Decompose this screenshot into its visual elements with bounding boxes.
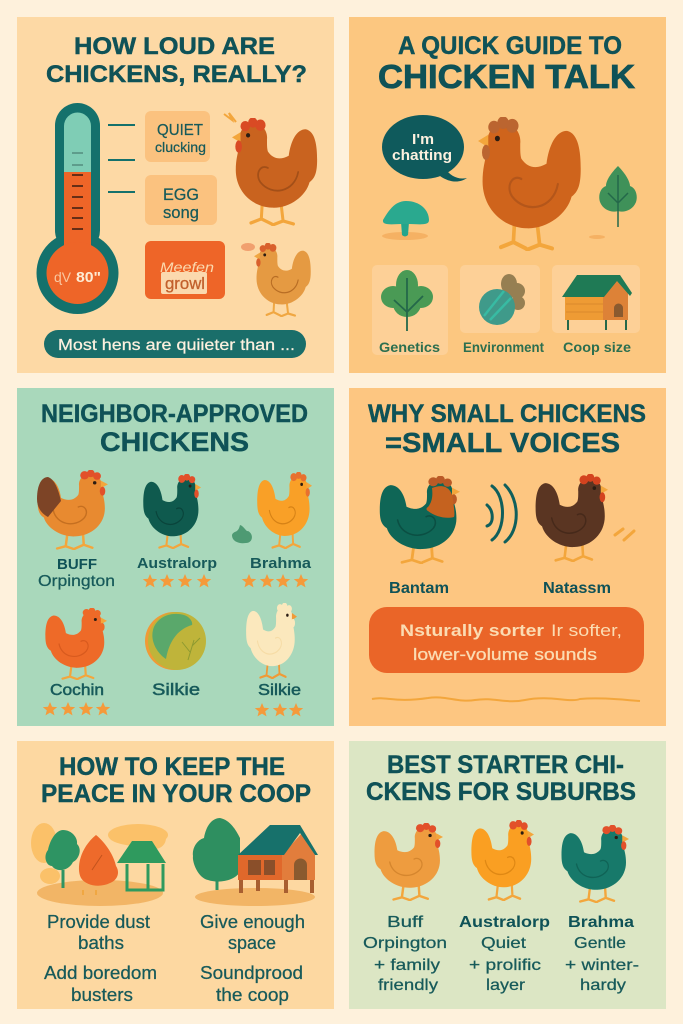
card: coop size: Coop size <box>563 339 631 355</box>
breed: australorp: layer <box>486 977 526 994</box>
tip: dust baths: Provide dust <box>47 912 150 932</box>
panel: chicken talk <box>349 17 666 373</box>
heading: keep the peace: PEACE IN YOUR COOP <box>41 780 311 808</box>
icon: sound waves <box>487 485 516 542</box>
breed: buff orpington: + family <box>374 957 440 974</box>
panel: how loud are chickens <box>17 17 334 373</box>
callout: softer sounds: lower-volume sounds <box>413 645 597 664</box>
panel: best starter chickens <box>349 741 666 1009</box>
heading: how loud: HOW LOUD ARE <box>74 33 275 60</box>
icon: bantam hen <box>380 476 460 563</box>
label: growl <box>145 241 225 299</box>
label: egg song <box>145 175 217 225</box>
callout: softer sounds <box>369 607 644 673</box>
speech bubble: chatting <box>392 147 452 164</box>
thermometer chart: ɖV <box>54 269 72 285</box>
card: environment <box>460 265 544 355</box>
callout: softer sounds: Nsturally sorter <box>400 621 544 640</box>
callout: softer sounds: Ir softer, <box>551 621 622 640</box>
label: quiet clucking <box>145 111 210 162</box>
tip: soundproof: Soundprood <box>200 963 303 983</box>
tip: enough space: Give enough <box>200 912 305 932</box>
tip: enough space <box>200 912 305 953</box>
card: genetics: Genetics <box>379 339 440 355</box>
breed: buff orpington <box>363 823 447 994</box>
thermometer chart <box>36 103 135 314</box>
breed: brahma: Brahma <box>568 914 634 931</box>
thermometer chart: 80" <box>76 269 101 286</box>
tip: enough space: space <box>228 933 276 953</box>
illustration: dust bath scene <box>31 823 168 906</box>
icon: brown hen <box>232 117 317 225</box>
heading: best starter <box>366 751 636 806</box>
tip: dust baths: baths <box>78 933 124 953</box>
label: egg song: song <box>163 203 199 222</box>
label: growl: Meefen <box>160 259 214 275</box>
callout: most hens: Most hens are quiieter than ... <box>58 337 295 354</box>
heading: best starter: BEST STARTER CHI- <box>387 751 624 779</box>
heading: neighbor-approved: CHICKENS <box>100 427 249 457</box>
rating stars <box>43 702 110 715</box>
breed: australorp: Australorp <box>459 914 550 931</box>
icon: big hen <box>478 116 581 250</box>
icon: brown hen <box>536 474 608 561</box>
breed: silkie hen <box>246 603 303 716</box>
breed: australorp <box>137 474 217 587</box>
heading: small chickens <box>368 400 646 458</box>
breed: cochin: Cochin <box>50 682 104 699</box>
icon: tree leaf <box>589 166 637 239</box>
tip: boredom busters: Add boredom <box>44 963 157 983</box>
card: coop size <box>552 265 640 355</box>
tip: soundproof <box>200 963 303 1005</box>
panel: neighbor-approved chickens <box>17 388 334 726</box>
heading: quick guide: CHICKEN TALK <box>378 58 635 95</box>
heading: how loud: CHICKENS, REALLY? <box>46 61 307 88</box>
heading: neighbor-approved: NEIGHBOR-APPROVED <box>41 400 308 428</box>
card: genetics <box>372 265 448 355</box>
label: growl: growl <box>165 274 205 293</box>
breed: australorp: + prolific <box>469 957 541 974</box>
illustration: coop scene <box>193 818 318 906</box>
breed: brahma <box>242 472 312 587</box>
breed: brahma: + winter- <box>565 957 639 974</box>
breed: silkie hen: Silkie <box>258 682 301 699</box>
breed: australorp: Australorp <box>137 555 217 572</box>
tip: dust baths <box>47 912 150 953</box>
callout: most hens <box>44 330 306 358</box>
card: environment: Environment <box>463 339 544 355</box>
panel: keep the peace <box>17 741 334 1009</box>
breed: buff orpington <box>37 470 115 590</box>
icon: puff <box>241 243 255 251</box>
breed: buff orpington: friendly <box>378 977 438 994</box>
icon: ball and leaves <box>479 274 525 325</box>
breed: brahma: hardy <box>580 977 626 994</box>
speech bubble: I'm <box>412 131 434 148</box>
icon: leaf <box>381 270 433 331</box>
breed: silkie cabbage <box>145 612 206 699</box>
breed: buff orpington: Orpington <box>38 573 115 590</box>
heading: small chickens: WHY SMALL CHICKENS <box>368 400 646 428</box>
breed: silkie cabbage: Silkie <box>152 680 200 699</box>
heading: small chickens: =SMALL VOICES <box>385 427 620 458</box>
breed: brahma: Gentle <box>574 935 626 952</box>
breed: buff orpington: Buff <box>387 914 424 931</box>
label: quiet clucking: QUIET <box>157 122 203 139</box>
breed: buff orpington: BUFF <box>57 556 97 573</box>
tip: boredom busters: busters <box>71 985 133 1005</box>
breed: australorp <box>459 820 550 994</box>
heading: best starter: CKENS FOR SUBURBS <box>366 778 636 806</box>
icon: coop <box>562 275 632 330</box>
breed: australorp: Quiet <box>481 935 527 952</box>
breed: brahma: Brahma <box>250 555 312 572</box>
tip: soundproof: the coop <box>216 985 289 1005</box>
icon: small hen <box>254 243 311 316</box>
label: natassm: Natassm <box>543 580 611 597</box>
speech bubble <box>382 115 467 182</box>
breed: brahma <box>562 825 639 994</box>
tip: boredom busters <box>44 963 157 1005</box>
heading: how loud <box>46 33 307 88</box>
rating stars <box>242 574 308 587</box>
heading: neighbor-approved <box>41 400 308 457</box>
label: quiet clucking: clucking <box>155 139 206 155</box>
icon: sparks <box>224 113 236 122</box>
icon: motion marks <box>615 529 634 540</box>
heading: keep the peace <box>41 753 311 808</box>
icon: small leaf <box>232 525 252 543</box>
rating stars <box>255 703 303 716</box>
heading: keep the peace: HOW TO KEEP THE <box>59 753 285 781</box>
label: egg song: EGG <box>163 185 199 204</box>
label: bantam: Bantam <box>389 580 449 597</box>
heading: quick guide: A QUICK GUIDE TO <box>398 32 622 60</box>
rating stars <box>143 574 211 587</box>
panel: small voices <box>349 388 666 726</box>
breed: buff orpington: Orpington <box>363 935 447 952</box>
heading: quick guide <box>378 32 635 95</box>
icon: mushroom <box>382 201 429 240</box>
breed: cochin <box>43 608 110 715</box>
